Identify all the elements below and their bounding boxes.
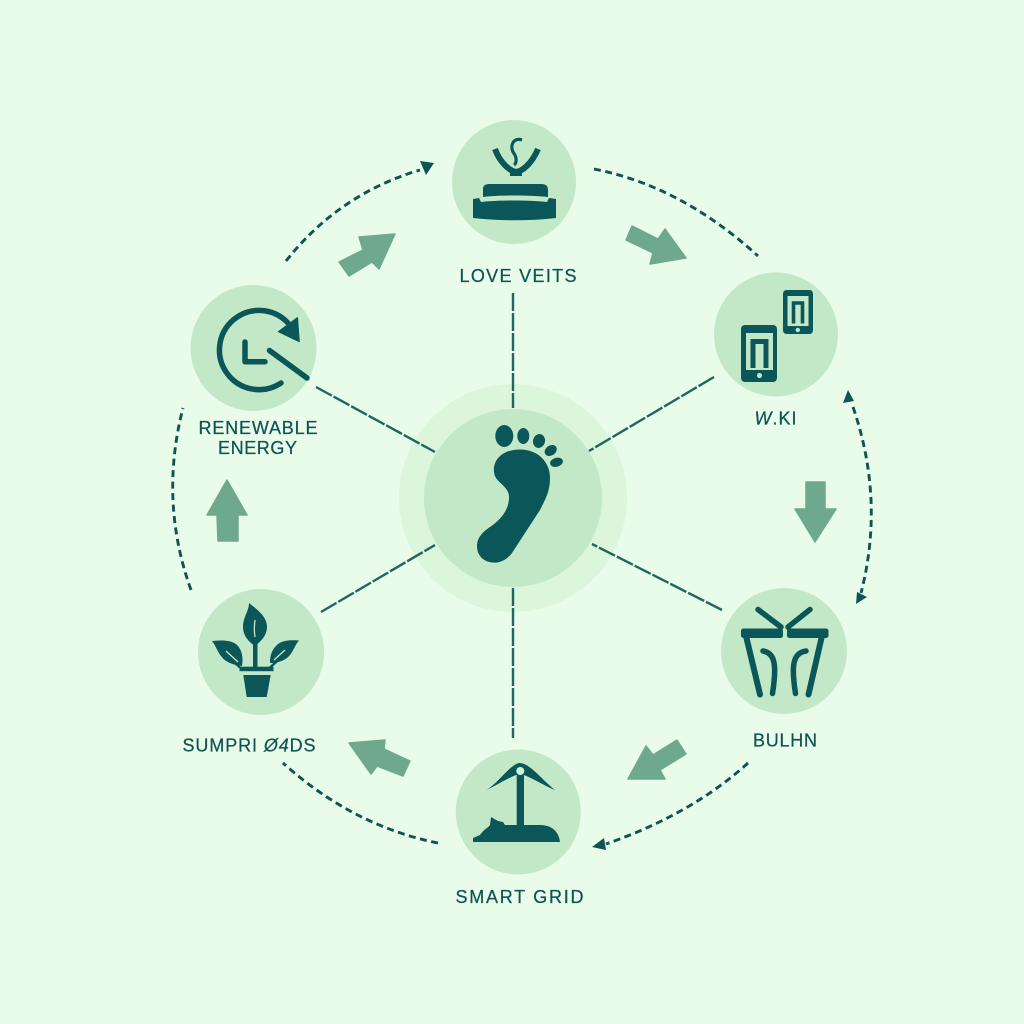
label: ENERGY bbox=[218, 438, 297, 458]
label: RENEWABLE bbox=[198, 418, 318, 438]
label: LOVE VEITS bbox=[460, 266, 576, 286]
node: lower left bbox=[183, 589, 324, 756]
direction arrows bbox=[207, 226, 836, 779]
icon: phones bbox=[741, 290, 813, 382]
label: SUMPRI Ø4DS bbox=[183, 736, 316, 756]
icon: wind turbine bbox=[473, 763, 560, 842]
icon: potted plant bbox=[212, 603, 299, 697]
icon: footprint bbox=[477, 425, 564, 563]
node: lower right bbox=[721, 588, 847, 750]
label: BULHN bbox=[753, 730, 817, 750]
central footprint node bbox=[399, 384, 627, 612]
spokes bbox=[316, 293, 722, 738]
node: upper left bbox=[190, 285, 318, 458]
icon: basket bbox=[741, 610, 828, 694]
label: W.KI bbox=[754, 408, 798, 428]
icon: bowl bbox=[473, 139, 556, 220]
node: top bbox=[452, 120, 576, 286]
label: SMART GRID bbox=[456, 887, 584, 907]
node: bottom bbox=[456, 750, 584, 907]
node: upper right bbox=[714, 272, 838, 428]
icon: cycle arrow bbox=[219, 310, 307, 390]
arc arrowheads bbox=[420, 161, 867, 850]
dashed cycle arcs bbox=[173, 169, 871, 844]
